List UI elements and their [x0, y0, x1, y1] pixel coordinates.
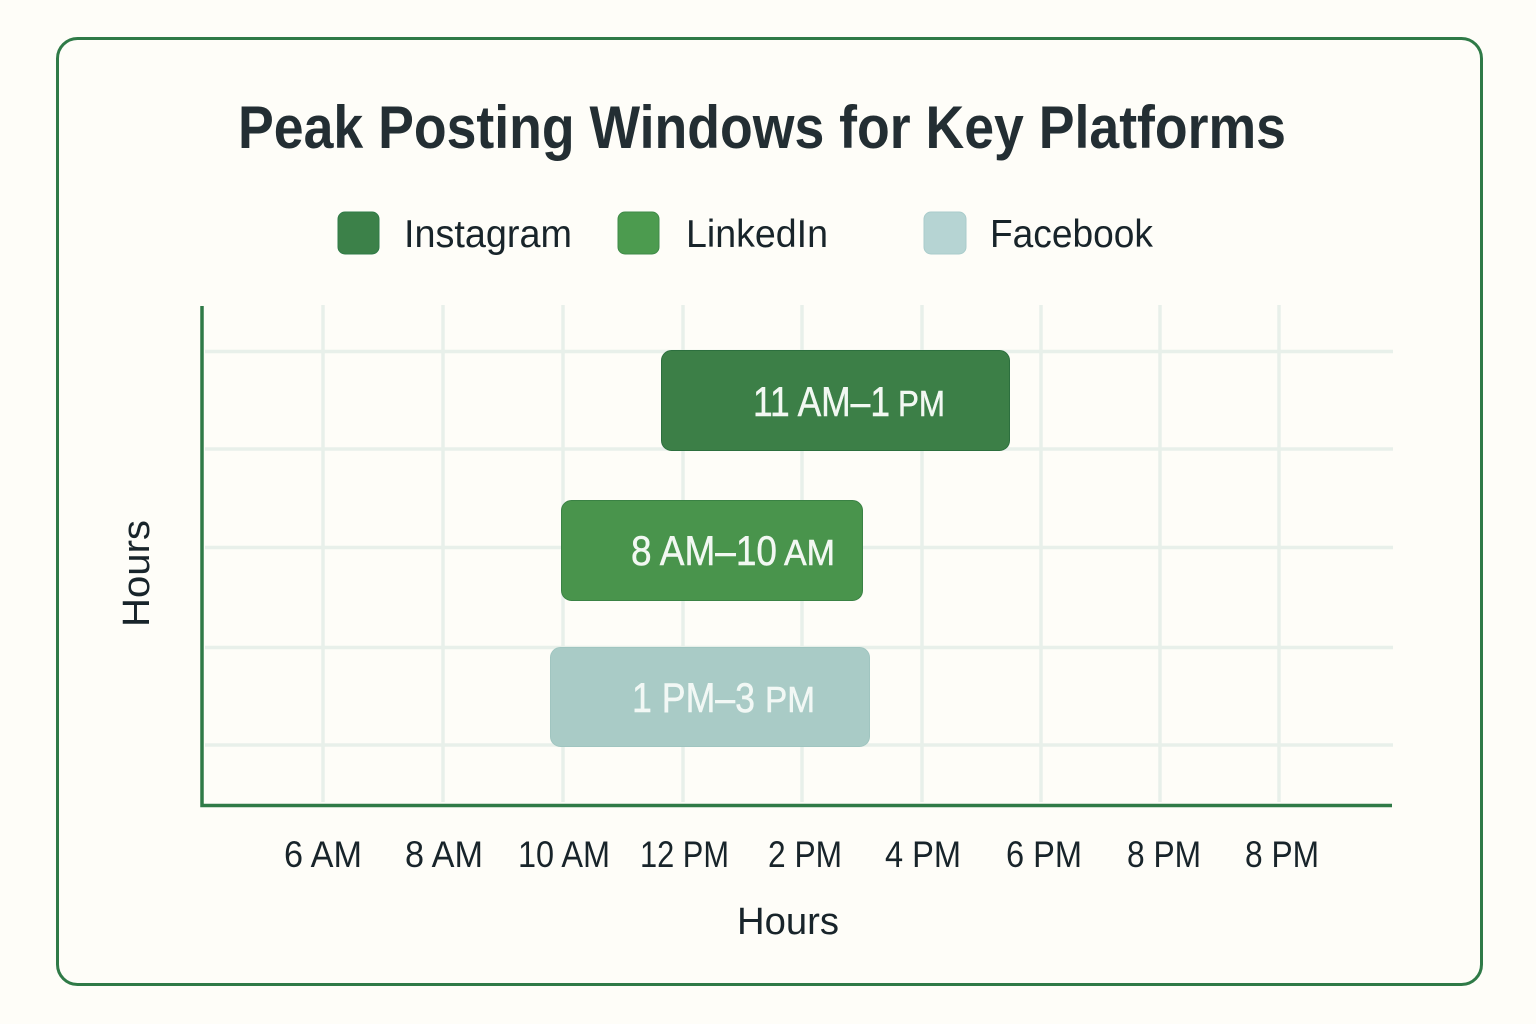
bar: Facebook 1 PM–3 PM	[550, 648, 870, 746]
x axis tick labels: 2 PM	[768, 834, 842, 875]
title: Peak Posting Windows for Key Platforms	[238, 94, 1286, 161]
legend item: LinkedIn	[618, 212, 828, 256]
x axis tick labels: 8 PM	[1245, 834, 1319, 875]
x axis title: Hours	[737, 901, 839, 943]
legend item: LinkedIn: LinkedIn	[686, 213, 828, 256]
legend item: Instagram: Instagram	[404, 213, 572, 256]
x axis tick labels: 12 PM	[640, 834, 729, 875]
x axis tick labels: 6 AM	[284, 834, 362, 875]
x axis tick labels: 8 AM	[405, 834, 483, 875]
bar: Instagram 11 AM–1 PM	[662, 350, 1010, 450]
x axis tick labels: 8 PM	[1127, 834, 1201, 875]
bar: Facebook 1 PM–3 PM: 1 PM–3	[632, 674, 755, 721]
chart grid	[205, 305, 1393, 802]
x axis tick labels	[284, 834, 1319, 875]
legend item: Facebook: Facebook	[990, 213, 1153, 256]
x axis tick labels: 6 PM	[1006, 834, 1082, 875]
chart axes	[202, 306, 1392, 806]
y axis title: Hours	[116, 520, 158, 627]
bar: LinkedIn 8 AM–10 AM: AM	[784, 532, 835, 573]
bar: LinkedIn 8 AM–10 AM: 8 AM–10	[631, 527, 777, 574]
bar: Facebook 1 PM–3 PM: PM	[765, 679, 815, 720]
x axis tick labels: 10 AM	[518, 834, 610, 875]
bar: LinkedIn 8 AM–10 AM	[562, 500, 862, 600]
bar: Instagram 11 AM–1 PM: 11 AM–1	[753, 378, 890, 425]
bar: Instagram 11 AM–1 PM: PM	[898, 383, 945, 424]
legend item: Facebook	[924, 212, 1153, 256]
legend item: Instagram	[338, 212, 572, 256]
legend	[338, 212, 1153, 256]
x axis tick labels: 4 PM	[885, 834, 961, 875]
